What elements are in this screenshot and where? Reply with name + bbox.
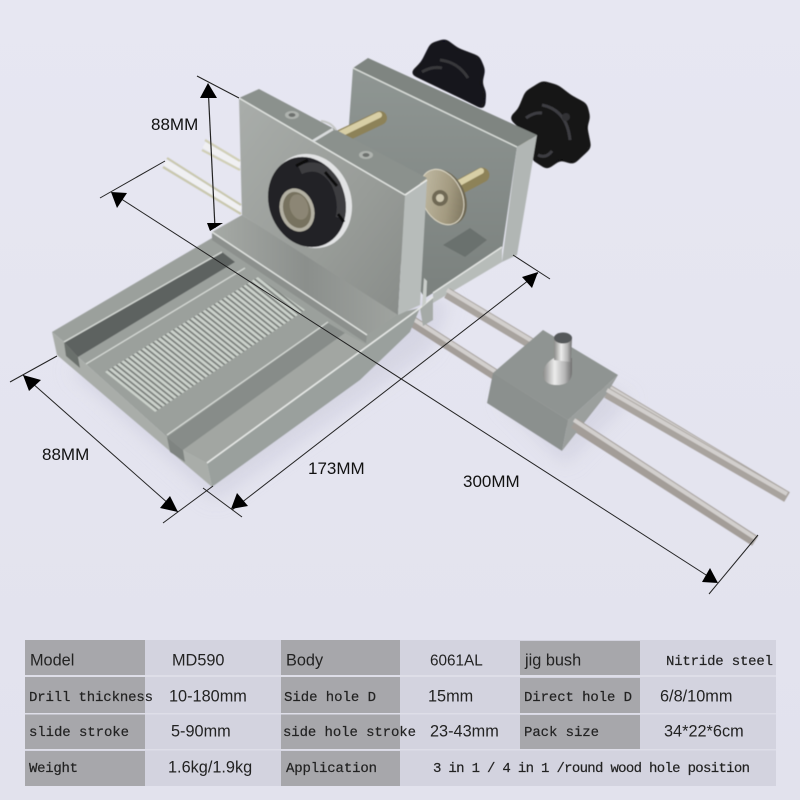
product: doweling jig xyxy=(52,41,787,541)
row 1: Body xyxy=(286,652,324,670)
row 3: side hole stroke xyxy=(283,725,416,741)
groove ridge highlight xyxy=(64,252,328,435)
label cells xyxy=(25,640,640,786)
row 3 xyxy=(29,722,744,741)
rear plate xyxy=(345,58,537,303)
left groove xyxy=(64,252,235,357)
stop pin xyxy=(543,332,572,385)
row 2: 15mm xyxy=(428,688,473,706)
clasp xyxy=(422,278,427,307)
base side face xyxy=(207,308,420,487)
row 1: Model xyxy=(30,652,74,670)
row 3: Pack size xyxy=(524,725,599,741)
row 3: 5-90mm xyxy=(171,722,231,740)
row 2 xyxy=(29,688,732,706)
dimension: 300MM length xyxy=(100,161,758,594)
dimension: 88MM height xyxy=(151,76,239,231)
dimension: 88MM height: 88MM xyxy=(151,115,198,134)
row 1: jig bush xyxy=(524,652,581,670)
dimension: 88MM width: 88MM xyxy=(42,445,89,464)
dimension: 173MM: 173MM xyxy=(308,459,365,478)
right groove xyxy=(167,323,345,450)
base top face xyxy=(52,238,420,463)
row 1 xyxy=(30,652,773,670)
row 4: Weight xyxy=(29,761,78,777)
steel rod 2 xyxy=(410,317,755,541)
dimension: 173MM xyxy=(203,255,550,517)
dimension: 300MM length: 300MM xyxy=(463,472,520,491)
row 2: Drill thickness xyxy=(29,690,153,706)
soft shadow xyxy=(70,300,630,500)
collet bushing xyxy=(256,142,365,260)
right rail xyxy=(183,333,367,463)
row 1: Nitride steel xyxy=(666,654,773,670)
brass shaft, rear xyxy=(340,115,380,137)
steel rod 1 xyxy=(447,290,787,497)
base rear block xyxy=(420,297,433,326)
row 3: slide stroke xyxy=(29,725,129,741)
dimension: 88MM width xyxy=(10,356,213,523)
row 2: 10-180mm xyxy=(169,688,247,706)
row 3: 34*22*6cm xyxy=(664,722,744,740)
row 1: MD590 xyxy=(172,652,224,670)
rail edge highlight xyxy=(207,297,433,463)
ribbed slide surface xyxy=(105,277,305,412)
front plate xyxy=(239,89,427,315)
knob stem xyxy=(520,140,542,148)
row 1: 6061AL xyxy=(430,652,483,670)
brass shaft and washer xyxy=(412,162,482,232)
front plate base wedge xyxy=(212,215,400,343)
row 4 xyxy=(29,758,750,777)
row 3: 23-43mm xyxy=(430,722,499,740)
specification table xyxy=(25,640,776,786)
base front face xyxy=(52,332,212,487)
row 2: Side hole D xyxy=(284,690,376,706)
groove notches xyxy=(64,342,185,462)
row 4: Application xyxy=(286,761,377,777)
row 4: 1.6kg/1.9kg xyxy=(168,758,252,776)
row 2: Direct hole D xyxy=(524,690,632,706)
table background xyxy=(25,640,776,786)
row 4: 3 in 1 / 4 in 1 /round wood hole position xyxy=(433,761,750,777)
stop block xyxy=(487,330,618,451)
icon: front knob xyxy=(512,83,589,167)
row 2: 6/8/10mm xyxy=(660,688,732,706)
icon: rear knob xyxy=(413,41,484,107)
rear guide rods xyxy=(163,140,241,214)
block rods re-emerging xyxy=(574,390,787,541)
